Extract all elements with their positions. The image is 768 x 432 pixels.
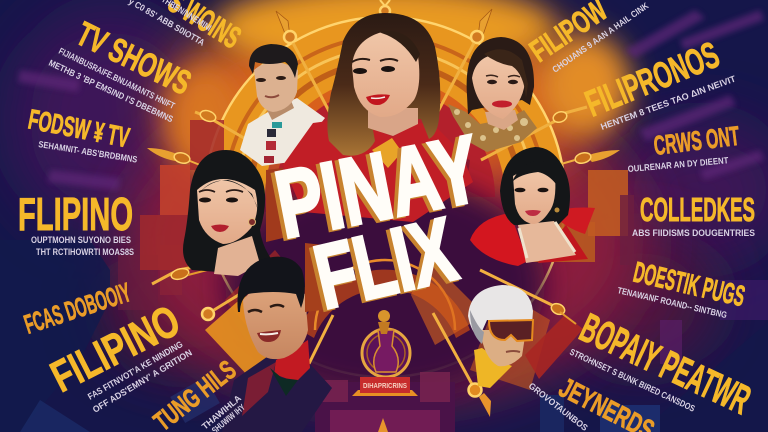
gold wheel ring — [205, 17, 565, 377]
hair — [249, 44, 298, 78]
word: FLIX: FLIX — [306, 200, 465, 328]
spear: upper right wheel — [481, 107, 587, 160]
goggles — [489, 320, 533, 341]
suit — [222, 352, 332, 432]
hair back — [467, 37, 534, 115]
spear: upper left — [276, 11, 330, 113]
word: PINAY: PINAY — [268, 116, 488, 259]
title extrusion blocks — [266, 168, 283, 242]
spear: right wheel — [540, 150, 620, 220]
portrait: helmet figure — [468, 285, 533, 388]
face — [513, 169, 555, 224]
caption: FILIPINO line 1: FAS FITNVOT'A KE NINDING — [86, 339, 185, 402]
caption: FILIPINO line 2: OFF ADS'EMNY' A GRITION — [91, 347, 194, 415]
title: PINAY FLIX — [264, 116, 488, 330]
heading: TV SHOWS: TV SHOWS — [70, 15, 197, 103]
blouse — [448, 104, 537, 152]
spear: left lower — [152, 255, 258, 284]
caption: DOESTIK PUGS: TENAWANF ROAND-- SINTBNG — [617, 285, 728, 320]
heading: FODSW TV: FODSW ¥ TV — [26, 103, 132, 153]
hair back — [183, 150, 272, 272]
red collars — [470, 213, 528, 266]
portrait: top left man — [240, 44, 325, 166]
caption: COLLEDKES: ABS FIIDISMS DOUGENTRIES — [632, 228, 755, 238]
chest — [214, 236, 260, 276]
heading: FCAS DOBOOIY: FCAS DOBOOIY — [21, 277, 134, 340]
word: PINAY — [264, 116, 488, 260]
city silhouette: lower left — [0, 240, 220, 432]
sky streaks — [18, 10, 764, 190]
caption: FODSW TV: SEHAMNIT- ABS'BRDBMNS — [38, 139, 138, 165]
chest — [518, 221, 576, 263]
yellow scarf — [474, 348, 512, 388]
trophy: DIHAPRICRINS — [363, 383, 407, 390]
face — [480, 330, 526, 366]
caption: CRWS ONT: OULRENAR AN DY DIEENT — [627, 155, 729, 174]
spear: bottom left — [276, 315, 333, 420]
trophy — [352, 310, 418, 432]
neck — [368, 108, 418, 136]
portrait: left woman — [183, 150, 272, 276]
helmet — [468, 285, 533, 338]
portrait: right woman — [470, 147, 595, 266]
city silhouette: lower right — [540, 280, 768, 432]
face — [197, 179, 257, 244]
face — [352, 32, 419, 117]
center maroon backdrop — [140, 120, 634, 432]
caption: TV SHOWS line 1: FIJIANBUSRAIFE.BNUAMANTS HNIFT — [57, 46, 177, 111]
white tunic — [240, 98, 325, 166]
spear: top center — [380, 0, 390, 16]
hair — [237, 257, 305, 312]
portrait: central woman — [283, 13, 473, 222]
portrait: top right woman — [448, 37, 537, 152]
spear: left middle — [147, 148, 210, 169]
spear: left upper — [195, 109, 285, 162]
word: FLIX: FLIX — [302, 201, 461, 330]
red collar — [274, 340, 310, 382]
caption: TUNG HILS line 1: THAWIHLA — [200, 393, 243, 432]
neck — [262, 98, 294, 120]
neck — [485, 110, 518, 130]
heading: FLIPINO left: FLIPINO — [18, 188, 133, 240]
spear: bottom right — [433, 313, 491, 417]
heading: FILIPINO lower left: FILIPINO — [43, 296, 188, 402]
word: PINAY: PINAY — [264, 117, 485, 260]
red dress — [283, 119, 473, 222]
caption: BOPAIY PEATWR: STROHNSET S BUNK BIRED CANSDOS — [568, 347, 697, 414]
hair mass — [327, 13, 440, 156]
hair — [500, 147, 570, 227]
face — [254, 62, 298, 112]
portrait: bottom man — [222, 257, 332, 432]
spear: lower left wheel — [202, 294, 240, 320]
caption: FILIPRONOS: HENTEM 8 TEES TAO ΔIN NEIVIT — [599, 73, 738, 132]
caption: FLIPINO line 2: THT RCTIHOWRTI MOAS8S — [36, 247, 134, 257]
caption: TV SHOWS line 2: METHB 3 'BP EMSIND I'S DBEBMNS — [47, 58, 175, 124]
face — [243, 281, 308, 359]
spear: upper right — [434, 9, 492, 119]
caption: FLIPINO line 1: OUPTMOHN SUYONO BIES — [31, 235, 131, 245]
spear: lower right — [480, 270, 576, 324]
face — [472, 54, 525, 119]
